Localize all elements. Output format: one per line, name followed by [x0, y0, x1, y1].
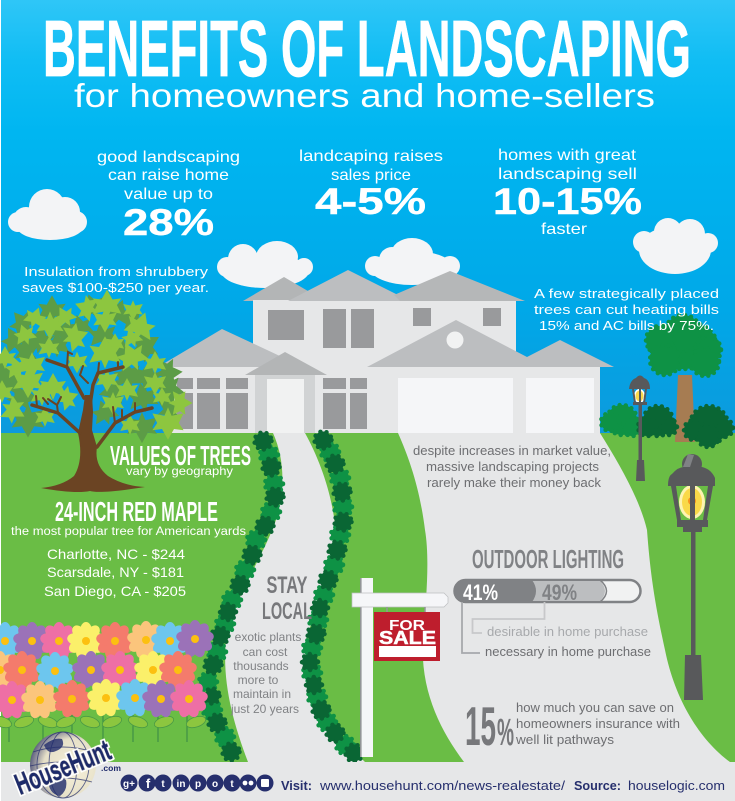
stat: sell faster 10-15%: faster — [541, 221, 588, 238]
text: exotic plants: just 20 years — [230, 702, 299, 716]
bar chart: outdoor lighting: 49% — [542, 580, 577, 605]
stat: 15% insurance savings: well lit pathways — [515, 733, 614, 747]
text: exotic plants: can cost — [243, 645, 288, 659]
flowers row 1 — [0, 620, 215, 661]
heading: values of trees — [110, 440, 251, 478]
flowers row 2 — [0, 651, 198, 691]
social icons: in — [177, 779, 185, 790]
porch — [245, 352, 327, 433]
text: stay local — [262, 572, 312, 625]
footer links: www.househunt.com/news-realestate/ — [319, 778, 565, 793]
text: stay local: STAY — [266, 572, 308, 599]
bar chart: outdoor lighting — [454, 580, 640, 605]
trunk and branches — [32, 352, 152, 492]
text: city values: Scarsdale, NY - $181 — [47, 564, 184, 580]
heading: red maple: 24-INCH RED MAPLE — [55, 496, 218, 527]
lower left wing — [158, 329, 373, 433]
footer links — [281, 778, 725, 793]
text: exotic plants: maintain in — [233, 687, 291, 701]
social icons: g+ — [123, 779, 135, 790]
logo: househunt globe: .com — [101, 764, 121, 773]
stat: 15% insurance savings: % — [497, 712, 514, 754]
lawn — [1, 433, 735, 763]
shrubs right — [601, 405, 733, 447]
subtitle: for homeowners and home-sellers — [74, 77, 655, 114]
bar chart: outdoor lighting: 41% — [463, 580, 498, 605]
text: city values — [44, 546, 186, 599]
background tree right — [646, 315, 721, 442]
text: strategically placed trees — [534, 286, 720, 333]
text: market value note — [413, 443, 611, 490]
social icons: p — [195, 779, 201, 790]
for sale sign: FOR — [389, 617, 425, 634]
for sale sign — [352, 578, 448, 757]
leaves: dark layer — [0, 290, 188, 443]
stat: home value 28%: good landscaping — [97, 149, 240, 166]
large lamp post — [668, 454, 715, 700]
text: insulation savings: Insulation from shrubbery — [24, 264, 209, 279]
stat: 15% insurance savings: homeowners insurance with — [516, 717, 680, 731]
cloud: behind house right — [365, 238, 460, 285]
house — [158, 270, 614, 433]
text: stay local: LOCAL — [262, 598, 312, 625]
footer links: Source: — [574, 778, 621, 793]
social icons: f — [146, 776, 151, 791]
driveway — [398, 433, 730, 762]
stat: sales price 4-5%: 4-5% — [315, 181, 426, 222]
shrubs: left of walkway — [199, 432, 284, 760]
heading: red maple: the most popular tree for American yards — [11, 526, 246, 538]
text: exotic plants — [230, 630, 301, 716]
stat: sales price 4-5% — [299, 148, 443, 222]
text: insulation savings: saves $100-$250 per year. — [22, 280, 209, 295]
stat: sell faster 10-15%: homes with great — [498, 147, 637, 164]
flowers row 3 — [0, 679, 209, 720]
stat: home value 28% — [97, 149, 240, 243]
stat: sell faster 10-15% — [493, 147, 642, 238]
text: city values: Charlotte, NC - $244 — [47, 546, 185, 562]
garage wing — [367, 320, 614, 433]
logo: househunt globe: HouseHunt — [10, 734, 116, 801]
stat: sales price 4-5%: sales price — [331, 167, 411, 184]
heading: values of trees: VALUES OF TREES — [110, 440, 251, 471]
cloud: left — [8, 189, 87, 240]
legend: desirable — [472, 602, 648, 639]
legend: desirable: desirable in home purchase — [487, 625, 648, 639]
heading: red maple — [11, 496, 246, 538]
text: strategically placed trees: A few strategically placed — [534, 286, 719, 301]
social icons: t — [161, 779, 165, 790]
stat: sell faster 10-15%: 10-15% — [493, 181, 642, 222]
shrubs: right of walkway — [302, 432, 362, 762]
walkway — [225, 433, 365, 762]
text: strategically placed trees: 15% and AC bills by 75%. — [539, 318, 714, 333]
text: exotic plants: exotic plants — [235, 630, 301, 644]
maple tree — [0, 290, 193, 492]
text: exotic plants: thousands — [233, 659, 289, 673]
social icons: o — [212, 779, 218, 790]
cloud: behind house left — [217, 241, 313, 288]
flower bed — [0, 620, 215, 742]
text: exotic plants: more to — [238, 673, 279, 687]
footer links: Visit: — [281, 778, 312, 793]
text: market value note: despite increases in market value, — [413, 443, 611, 458]
text: strategically placed trees: trees can cut heating bills — [534, 302, 720, 317]
text: outdoor lighting heading: OUTDOOR LIGHTING — [472, 544, 624, 574]
footer links: houselogic.com — [628, 778, 725, 793]
stat: 15% insurance savings — [465, 695, 680, 757]
leaves: light layer — [0, 290, 193, 440]
stat: 15% insurance savings: how much you can save on — [516, 701, 674, 715]
text: city values: San Diego, CA - $205 — [44, 583, 186, 599]
stat: home value 28%: can raise home — [108, 167, 229, 184]
small lamp post — [629, 376, 650, 481]
text: market value note: rarely make their money back — [427, 475, 602, 490]
legend: necessary — [462, 602, 651, 659]
text: insulation savings — [22, 264, 209, 295]
stat: sales price 4-5%: landcaping raises — [299, 148, 443, 165]
logo: househunt globe — [10, 732, 121, 801]
upper storey — [243, 270, 525, 370]
cloud: right — [633, 218, 718, 274]
social icons — [120, 774, 274, 792]
legend: necessary: necessary in home purchase — [485, 645, 651, 659]
stat: sell faster 10-15%: landscaping sell — [498, 166, 637, 183]
stat: home value 28%: 28% — [123, 202, 214, 243]
text: market value note: massive landscaping projects — [426, 459, 600, 474]
social icons: t — [230, 779, 234, 790]
sky background — [1, 0, 735, 440]
stems and foliage — [0, 714, 207, 742]
stat: 15% insurance savings: 15 — [465, 695, 496, 757]
footer bar — [1, 762, 735, 801]
stat: home value 28%: value up to — [124, 186, 213, 203]
for sale sign: SALE — [379, 627, 436, 648]
heading: values of trees: vary by geography — [126, 464, 233, 478]
